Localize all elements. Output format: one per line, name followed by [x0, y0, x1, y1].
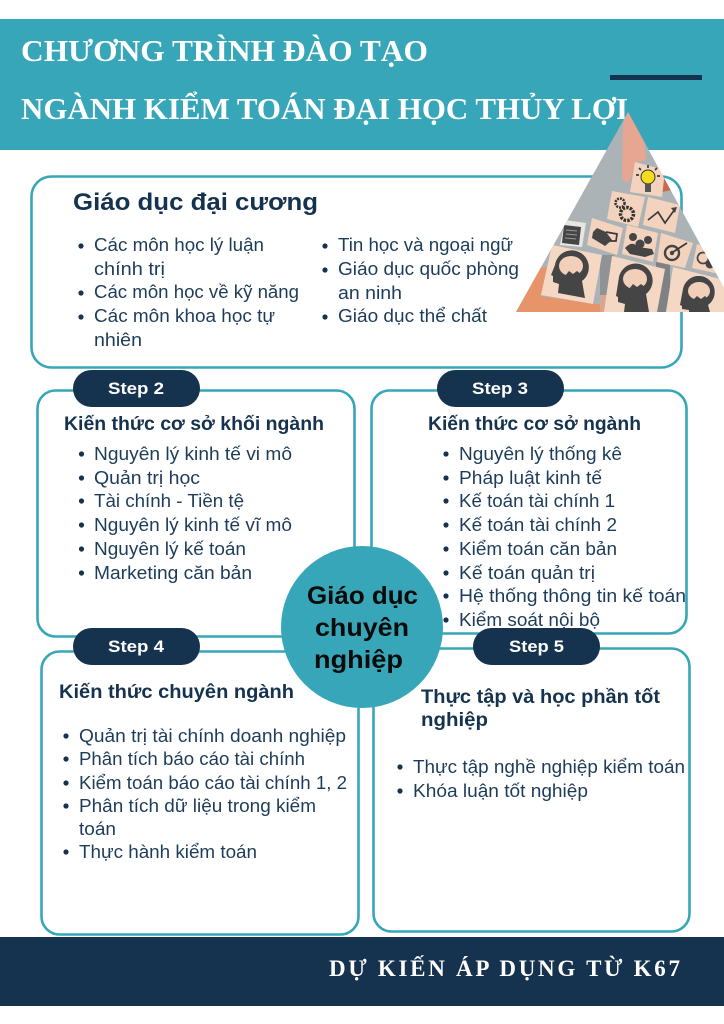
panel: step 5 — [374, 648, 690, 932]
list: right column: Giáo dục quốc phòng — [338, 258, 519, 279]
badge: step 2 — [73, 370, 200, 407]
accent line — [610, 75, 702, 80]
list: step 3: Kiểm toán căn bản — [459, 538, 617, 559]
heading: step 4: Kiến thức chuyên ngành — [59, 682, 294, 703]
panel: step 3 — [372, 390, 686, 634]
block: target — [657, 233, 693, 268]
title: NGÀNH KIỂM TOÁN ĐẠI HỌC THỦY LỢI — [21, 91, 628, 126]
list: step 4: toán — [79, 818, 116, 839]
list: left column — [78, 234, 299, 350]
list: step 5: Thực tập nghề nghiệp kiểm toán — [413, 756, 685, 777]
title: CHƯƠNG TRÌNH ĐÀO TẠO — [21, 33, 428, 68]
badge: step 5 — [473, 628, 600, 665]
list: right column: an ninh — [338, 282, 402, 303]
heading: step 5: Thực tập và học phần tốt — [421, 687, 661, 708]
block: gears — [607, 191, 645, 227]
block: speech bubbles — [692, 244, 716, 274]
list: right column: Giáo dục thể chất — [338, 305, 487, 326]
list: step 2: Tài chính - Tiền tệ — [94, 490, 244, 511]
list: step 4: Phân tích báo cáo tài chính — [79, 748, 305, 769]
badge: step 5: Step 5 — [509, 637, 564, 656]
list: step 4: Quản trị tài chính doanh nghiệp — [79, 725, 346, 746]
center circle: specialized education: Giáo dục — [307, 582, 418, 610]
badge: step 4: Step 4 — [108, 637, 165, 656]
list: step 2 — [79, 443, 292, 583]
list: step 3: Kiểm soát nội bộ — [459, 609, 600, 630]
list: right column: Tin học và ngoại ngữ — [338, 234, 513, 255]
list: step 5 — [397, 756, 685, 801]
list: step 3 — [443, 443, 686, 630]
list: step 3: Hệ thống thông tin kế toán — [459, 585, 686, 606]
heading: step 3: Kiến thức cơ sở ngành — [428, 414, 641, 435]
hand — [622, 112, 646, 182]
list: left column: Các môn học về kỹ năng — [94, 281, 299, 302]
block: head left — [541, 245, 602, 304]
panel: step 2 — [38, 390, 354, 636]
image: pyramid of wooden blocks — [510, 110, 724, 315]
list: step 4 — [63, 725, 347, 862]
list: step 4: Kiểm toán báo cáo tài chính 1, 2 — [79, 772, 347, 793]
title — [21, 33, 628, 126]
list: step 5: Khóa luận tốt nghiệp — [413, 780, 588, 801]
list: step 3: Pháp luật kinh tế — [459, 467, 603, 488]
list: right column — [322, 234, 519, 326]
heading: step 5 — [421, 687, 661, 731]
block: people — [622, 225, 658, 262]
heading: step 2: Kiến thức cơ sở khối ngành — [64, 414, 324, 435]
list: step 4: Thực hành kiểm toán — [79, 841, 257, 862]
heading: step 5: nghiệp — [421, 710, 488, 731]
list: step 2: Nguyên lý kinh tế vi mô — [94, 443, 292, 464]
badge: step 4 — [73, 628, 200, 665]
footer banner: DỰ KIẾN ÁP DỤNG TỪ K67 — [329, 955, 680, 981]
list: step 2: Nguyên lý kinh tế vĩ mô — [94, 514, 292, 535]
block: lightbulb — [630, 162, 665, 197]
list: left column: Các môn khoa học tự — [94, 305, 275, 326]
list: step 3: Kế toán tài chính 2 — [459, 514, 617, 535]
list: step 3: Kế toán tài chính 1 — [459, 490, 615, 511]
badge: step 3: Step 3 — [472, 379, 528, 398]
header banner — [0, 19, 724, 150]
center circle: specialized education — [281, 546, 443, 708]
list: step 2: Marketing căn bản — [94, 562, 252, 583]
center circle: specialized education: nghiệp — [314, 646, 403, 674]
block: head right — [666, 267, 724, 312]
badge: step 3 — [437, 370, 564, 407]
block: handshake — [587, 218, 623, 255]
block: document — [560, 220, 586, 247]
list: step 3: Kế toán quản trị — [459, 562, 595, 583]
heading: general education: Giáo dục đại cương — [73, 189, 318, 216]
badge: step 2: Step 2 — [108, 379, 164, 398]
panel: general education — [32, 176, 682, 368]
list: step 2: Quản trị học — [94, 467, 200, 488]
block: line graph — [643, 197, 680, 233]
footer banner — [0, 937, 724, 1006]
list: step 4: Phân tích dữ liệu trong kiểm — [79, 795, 316, 816]
list: left column: Các môn học lý luận — [94, 234, 264, 255]
block: head middle — [604, 256, 665, 312]
center circle: specialized education: chuyên — [315, 614, 409, 642]
panel: step 4 — [42, 652, 358, 934]
list: step 2: Nguyên lý kế toán — [94, 538, 246, 559]
list: left column: nhiên — [94, 329, 142, 350]
list: step 3: Nguyên lý thống kê — [459, 443, 622, 464]
list: left column: chính trị — [94, 258, 165, 279]
